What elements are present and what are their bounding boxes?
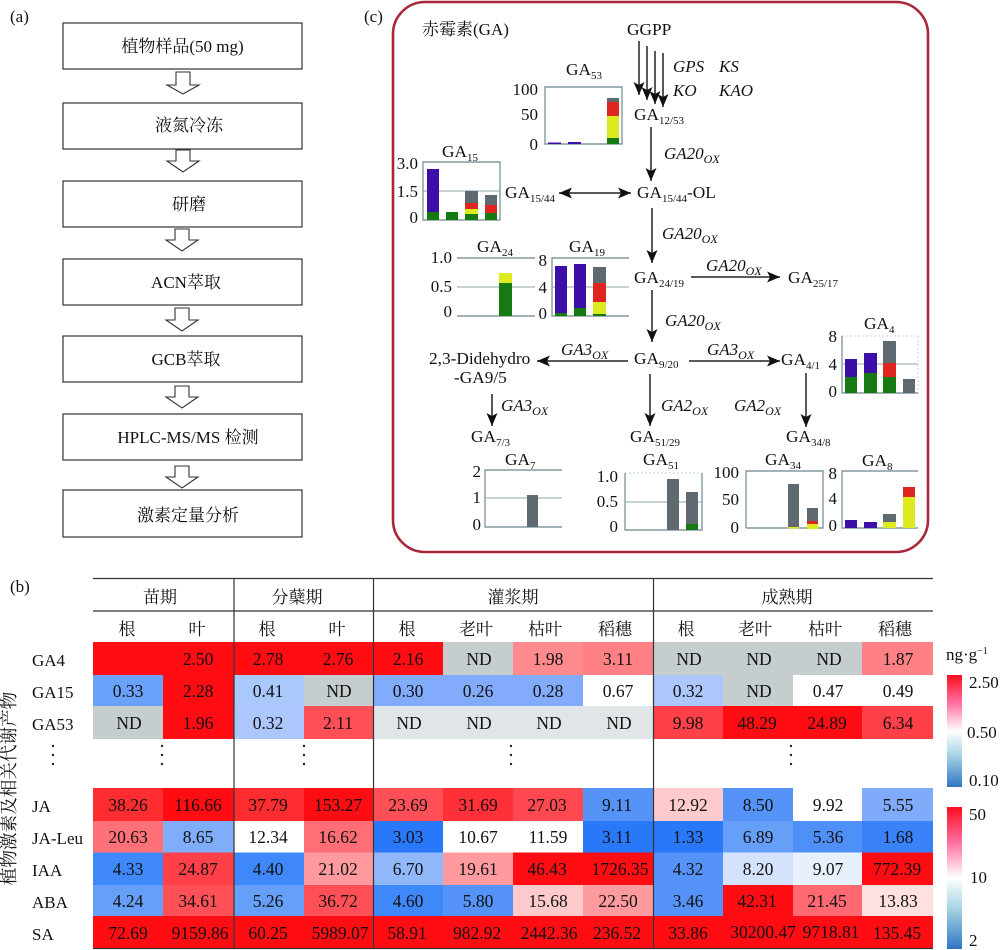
values: GA53: 9.98 <box>673 713 704 733</box>
legend: GA colour scale: 2.50 <box>969 673 999 692</box>
panel a label: (a) <box>10 7 29 26</box>
values: ABA: 36.72 <box>318 891 358 911</box>
panel border <box>393 2 928 552</box>
values: JA-Leu: 12.34 <box>248 827 288 847</box>
chart: GA4: 4 <box>828 355 838 374</box>
panel c label: (c) <box>364 7 383 26</box>
chart: GA19 <box>538 237 629 323</box>
row labels: JA <box>32 797 52 816</box>
step: grinding: 研磨 <box>172 195 206 214</box>
arrow: GA9/20 to GA51/29 <box>649 374 651 426</box>
step: hormone quantification <box>63 490 302 537</box>
values: GA53: 24.89 <box>807 713 847 733</box>
values: ABA: 5.26 <box>253 891 284 911</box>
enzyme: GA2ox right: OX <box>765 404 782 418</box>
node: GA4/1: GA <box>781 350 806 369</box>
values: SA: 5989.07 <box>312 923 369 943</box>
values: GA53: ND <box>116 713 142 733</box>
values: GA4: 2.78 <box>253 649 284 669</box>
node: GA12/53: 12/53 <box>659 115 685 127</box>
enzyme: GA3ox: GA3 <box>561 340 592 359</box>
values: JA-Leu: 3.11 <box>602 827 632 847</box>
arrow: GA9/20 to GA4/1 <box>689 360 780 362</box>
chart: GA7: 2 <box>472 462 481 481</box>
legend: other hormones colour scale: 50 <box>969 805 986 824</box>
chart: GA15: 15 <box>467 152 478 164</box>
values: GA4: ND <box>676 649 702 669</box>
arrow: step 3 to 4 <box>166 229 198 251</box>
values: SA: 135.45 <box>873 923 921 943</box>
enzyme: GA3ox: OX <box>738 348 755 362</box>
node: GA9/20: 9/20 <box>659 359 679 371</box>
table rules <box>93 578 933 949</box>
panel: hormone heatmap <box>0 578 999 950</box>
chart: GA7: 7 <box>530 460 536 472</box>
row cells: GA53 <box>93 706 933 739</box>
arrow: GA9/20 to didehydro <box>537 360 628 362</box>
chart: GA34: GA <box>765 450 790 469</box>
enzyme: GA20ox: OX <box>702 232 718 246</box>
row labels: GA53 <box>32 715 74 734</box>
chart: GA53: 0 <box>530 135 538 154</box>
cell values <box>108 649 921 943</box>
stage headers: 苗期 <box>143 588 177 607</box>
enzyme labels: GPS KS KO KAO: GPS <box>673 57 705 76</box>
values: GA15: 0.30 <box>393 681 424 701</box>
chart: GA24 <box>431 237 535 321</box>
chart: GA7: 0 <box>472 515 481 534</box>
values: JA: 9.92 <box>813 795 843 815</box>
tissue headers: 老叶 <box>738 620 772 639</box>
arrows: GGPP to GA12/53 <box>639 41 663 107</box>
step: hormone quantification: 激素定量分析 <box>137 506 239 525</box>
node: GA34/8: GA <box>786 427 811 446</box>
row cells: JA-Leu <box>93 821 933 853</box>
chart: GA51: 0.5 <box>597 492 618 511</box>
values: GA4: 1.98 <box>533 649 564 669</box>
node: GA34/8: 34/8 <box>811 437 831 449</box>
values: SA <box>108 922 921 943</box>
enzyme: GA2ox left: GA2 <box>661 396 692 415</box>
tissue headers: 根 <box>118 619 136 639</box>
row labels: IAA <box>32 861 63 880</box>
values: GA4: 1.87 <box>883 649 914 669</box>
values: SA: 982.92 <box>453 923 501 943</box>
values: JA-Leu: 20.63 <box>108 827 148 847</box>
values: JA: 23.69 <box>388 795 428 815</box>
enzyme: GA20ox: GA20 <box>706 256 746 275</box>
chart: GA53: GA <box>566 60 591 79</box>
enzyme: GA3ox: OX <box>592 348 609 362</box>
stage headers: 成熟期 <box>762 588 812 607</box>
values: JA-Leu: 1.33 <box>673 827 704 847</box>
values: ABA: 5.80 <box>463 891 494 911</box>
values: ABA: 4.60 <box>393 891 424 911</box>
node: GA7/3: 7/3 <box>496 437 511 449</box>
node: GGPP: GGPP <box>627 20 671 39</box>
values: ABA: 3.46 <box>673 891 704 911</box>
tissue headers: 枯叶 <box>808 620 842 639</box>
row cells: GA15 <box>93 675 793 706</box>
values: JA: 38.26 <box>108 795 148 815</box>
chart: GA24: 1.0 <box>431 248 452 267</box>
arrow: didehydro to GA7/3 <box>491 394 493 426</box>
stage headers <box>143 587 812 607</box>
chart: GA15: 0 <box>410 208 418 227</box>
values: GA4: 2.50 <box>183 649 214 669</box>
values: IAA: 24.87 <box>178 859 218 879</box>
enzyme labels: GPS KS KO KAO <box>672 57 753 100</box>
values: JA: 9.11 <box>602 795 632 815</box>
step: GCB extraction: GCB萃取 <box>152 349 220 369</box>
chart: GA24: 24 <box>502 247 513 259</box>
values: IAA: 4.40 <box>253 859 284 879</box>
chart: GA51: 51 <box>668 460 679 472</box>
values: JA: 116.66 <box>174 795 222 815</box>
values: IAA: 9.07 <box>813 859 844 879</box>
chart: GA24: GA <box>477 237 502 256</box>
chart: GA15: GA <box>442 142 467 161</box>
step: liquid nitrogen freezing <box>63 103 302 149</box>
chart: GA19: GA <box>569 237 594 256</box>
row labels: JA-Leu <box>32 829 83 848</box>
values: IAA: 19.61 <box>458 859 498 879</box>
values: JA-Leu: 6.89 <box>743 827 774 847</box>
values: JA-Leu: 10.67 <box>458 827 498 847</box>
enzyme: GA20ox: GA20 <box>662 224 702 243</box>
values: IAA: 772.39 <box>873 859 921 879</box>
legend unit: ng·g <box>946 645 977 664</box>
values: SA: 30200.47 <box>730 922 796 942</box>
chart: GA51: 1.0 <box>597 467 618 486</box>
node: GA12/53: GA <box>634 105 659 124</box>
chart: GA8: 4 <box>828 489 838 508</box>
values: GA15: 0.26 <box>463 681 494 701</box>
values: ABA <box>113 891 918 911</box>
step: plant sample <box>63 23 302 69</box>
values: ABA: 21.45 <box>807 891 847 911</box>
node: GA15/44-OL: -OL <box>687 183 716 202</box>
values: ABA: 13.83 <box>878 891 918 911</box>
enzyme: GA3ox: GA3 <box>707 340 738 359</box>
legend: other hormones colour scale: 10 <box>970 868 987 887</box>
values: GA15: 0.67 <box>603 681 634 701</box>
enzyme: GA20ox: OX <box>704 152 720 166</box>
step: ACN extraction <box>63 259 302 305</box>
chart: GA8 <box>828 451 918 535</box>
row cells: JA <box>93 788 933 821</box>
enzyme: GA3ox: GA3 <box>501 396 532 415</box>
values: SA: 60.25 <box>248 923 288 943</box>
values: GA15: 0.47 <box>813 681 844 701</box>
heatmap cells <box>93 642 933 949</box>
chart: GA51: 0 <box>610 517 618 536</box>
node: GA24/19: 24/19 <box>659 278 685 290</box>
arrow: GA4/1 to GA34/8 <box>805 373 807 427</box>
ellipsis dots <box>52 745 792 765</box>
values: IAA: 8.20 <box>743 859 774 879</box>
chart: GA4: GA <box>864 314 889 333</box>
stage headers: 分蘖期 <box>272 587 322 607</box>
values: GA4: 2.16 <box>393 649 424 669</box>
chart: GA34: 0 <box>730 518 739 537</box>
chart: GA51: GA <box>643 450 668 469</box>
step: GCB extraction <box>63 336 302 382</box>
chart: GA34: 50 <box>722 490 739 509</box>
chart: GA4: 0 <box>828 382 837 401</box>
chart: GA53: 100 <box>512 80 538 99</box>
arrow: step 5 to 6 <box>166 386 198 408</box>
values: ABA: 4.24 <box>113 891 144 911</box>
panel: extraction workflow <box>63 23 302 537</box>
node: GA24/19: GA <box>634 268 659 287</box>
node: 2,3-Didehydro-GA9/5 <box>429 349 530 387</box>
tissue headers: 叶 <box>328 620 346 639</box>
enzyme: GA20ox: GA20 <box>665 311 705 330</box>
values: JA: 5.55 <box>883 795 914 815</box>
chart: GA34: 34 <box>790 460 801 472</box>
enzyme: GA3ox: OX <box>532 404 549 418</box>
values: SA: 2442.36 <box>521 923 578 943</box>
values: GA53: ND <box>606 713 632 733</box>
values: SA: 72.69 <box>108 923 148 943</box>
legend: GA colour scale: 0.50 <box>967 723 997 742</box>
values: JA-Leu: 3.03 <box>393 827 424 847</box>
values: GA4: 2.76 <box>323 649 354 669</box>
values: GA4: 3.11 <box>603 649 633 669</box>
legend unit: −1 <box>977 646 988 657</box>
panel: gibberellin pathway <box>393 2 928 552</box>
node: GA4/1: 4/1 <box>806 360 820 372</box>
values: IAA: 6.70 <box>393 859 424 879</box>
tissue headers: 稻穗 <box>878 620 913 639</box>
values: JA: 37.79 <box>248 795 288 815</box>
values: GA4 <box>183 649 914 669</box>
step: HPLC-MS/MS detection <box>63 414 302 460</box>
values: GA15: ND <box>746 681 772 701</box>
step: grinding <box>63 181 302 227</box>
values: IAA: 46.43 <box>527 859 567 879</box>
node: 2,3-Didehydro-GA9/5: -GA9/5 <box>454 368 507 387</box>
values: IAA: 4.32 <box>673 859 703 879</box>
node: 2,3-Didehydro-GA9/5: 2,3-Didehydro <box>429 349 530 368</box>
step: liquid nitrogen freezing: 液氮冷冻 <box>155 116 224 135</box>
panel title: 赤霉素(GA) <box>422 20 509 39</box>
values: ABA: 42.31 <box>737 891 777 911</box>
values: JA-Leu: 8.65 <box>183 827 214 847</box>
legend: other hormones colour scale: 2 <box>969 931 978 950</box>
values: SA: 9159.86 <box>172 923 229 943</box>
chart: GA15 <box>397 142 500 227</box>
values: GA53: ND <box>396 713 422 733</box>
values: GA15: 0.32 <box>673 681 703 701</box>
values: JA-Leu: 5.36 <box>813 827 844 847</box>
values: IAA: 4.33 <box>113 859 144 879</box>
values: GA4: ND <box>746 649 772 669</box>
values: SA: 33.86 <box>668 923 708 943</box>
step: plant sample: 植物样品(50 mg) <box>121 37 244 56</box>
chart: GA4 <box>828 314 918 401</box>
step: ACN extraction: ACN萃取 <box>151 272 221 292</box>
node: GA25/17: GA <box>788 268 813 287</box>
values: GA4: ND <box>466 649 492 669</box>
tissue headers: 老叶 <box>459 620 493 639</box>
values: JA: 27.03 <box>527 795 567 815</box>
values: GA15: 0.49 <box>883 681 914 701</box>
chart: GA34 <box>714 450 823 537</box>
values: JA: 12.92 <box>668 795 708 815</box>
tissue headers: 枯叶 <box>528 620 562 639</box>
tissue headers: 稻穗 <box>598 620 633 639</box>
row labels: ABA <box>32 893 69 912</box>
chart: GA7 <box>472 450 562 534</box>
tissue headers: 叶 <box>188 620 206 639</box>
row labels: GA4 <box>32 651 66 670</box>
arrow: step 4 to 5 <box>166 308 198 331</box>
values: JA-Leu: 1.68 <box>883 827 914 847</box>
arrow: GA12/53 to GA15/44-OL <box>650 127 652 181</box>
values: JA-Leu <box>108 827 914 847</box>
chart: GA8: 8 <box>828 464 837 483</box>
values: GA15: ND <box>326 681 352 701</box>
values: GA53: ND <box>466 713 492 733</box>
node: GA25/17: 25/17 <box>813 278 839 290</box>
tissue headers: 根 <box>398 619 416 639</box>
values: JA-Leu: 16.62 <box>318 827 358 847</box>
node: GA15/44: 15/44 <box>530 193 556 205</box>
enzyme: GA20ox: GA20 <box>664 144 704 163</box>
node: GA51/29: GA <box>630 427 655 446</box>
arrow: step 1 to 2 <box>167 72 199 94</box>
panel b label: (b) <box>10 577 30 596</box>
row cells: ABA <box>93 885 933 916</box>
row labels <box>32 651 83 944</box>
legend: GA colour scale <box>947 673 999 790</box>
arrow: step 2 to 3 <box>167 150 199 172</box>
chart: GA4: 4 <box>889 324 895 336</box>
step: HPLC-MS/MS detection: HPLC-MS/MS 检测 <box>117 428 259 447</box>
values: IAA: 1726.35 <box>592 859 649 879</box>
node: GA9/20: GA <box>634 349 659 368</box>
arrow: GA15/44 reversible <box>559 192 631 194</box>
chart: GA53: 53 <box>591 70 602 82</box>
chart: GA19: 19 <box>594 247 605 259</box>
values: GA53: 0.32 <box>253 713 283 733</box>
chart: GA24: 0 <box>444 302 452 321</box>
arrow: GA24/19 to GA9/20 <box>651 290 653 342</box>
legend: other hormones colour scale <box>947 805 987 950</box>
tissue headers: 根 <box>258 619 276 639</box>
values: GA15: 0.41 <box>253 681 283 701</box>
chart: GA53 <box>512 60 622 154</box>
enzyme labels: GPS KS KO KAO: KS <box>718 57 739 76</box>
chart: GA53: 50 <box>521 105 538 124</box>
values: GA53: 2.11 <box>323 713 353 733</box>
chart: GA19: 4 <box>538 278 548 297</box>
chart: GA51 <box>597 450 702 536</box>
chart: GA8: GA <box>862 451 887 470</box>
values: IAA: 21.02 <box>318 859 358 879</box>
row cells: IAA <box>93 852 933 886</box>
node: GA15/44-OL: 15/44 <box>662 193 688 205</box>
values: GA4: ND <box>816 649 842 669</box>
values: JA: 31.69 <box>458 795 498 815</box>
node: GA51/29: 51/29 <box>655 437 681 449</box>
values: JA: 153.27 <box>314 795 362 815</box>
values: GA15: 0.28 <box>533 681 564 701</box>
values: GA53: ND <box>536 713 562 733</box>
stage headers: 灌浆期 <box>488 588 538 607</box>
row cells: SA <box>93 916 933 949</box>
node: GA15/44-OL: GA <box>637 183 662 202</box>
row cells: GA4 <box>93 642 933 675</box>
enzyme labels: GPS KS KO KAO: KAO <box>718 81 753 100</box>
enzyme: GA20ox: OX <box>705 319 721 333</box>
values: SA: 58.91 <box>387 923 427 943</box>
values: GA53: 48.29 <box>737 713 777 733</box>
values: GA53: 1.96 <box>183 713 214 733</box>
arrow: step 6 to 7 <box>166 466 198 488</box>
values: SA: 9718.81 <box>803 922 859 942</box>
chart: GA15: 1.5 <box>397 182 418 201</box>
row labels: GA15 <box>32 683 74 702</box>
chart: GA19: 0 <box>538 304 547 323</box>
chart: GA24: 0.5 <box>431 277 452 296</box>
values: ABA: 34.61 <box>178 891 218 911</box>
values: ABA: 22.50 <box>598 891 638 911</box>
enzyme: GA2ox right: GA2 <box>734 396 765 415</box>
enzyme: GA20ox: OX <box>746 264 762 278</box>
values: IAA <box>113 859 921 879</box>
arrow: GA15/44-OL to GA24/19 <box>651 208 653 263</box>
values: GA15: 0.33 <box>113 681 144 701</box>
values: GA15 <box>113 681 914 701</box>
legend: GA colour scale: 0.10 <box>969 771 999 790</box>
chart: GA4: 8 <box>828 327 837 346</box>
tissue headers <box>118 619 913 639</box>
chart: GA15: 3.0 <box>397 154 418 173</box>
chart: GA34: 100 <box>714 463 739 482</box>
values: SA: 236.52 <box>593 923 641 943</box>
values: ABA: 15.68 <box>528 891 568 911</box>
values: GA53 <box>116 713 914 733</box>
chart: GA7: GA <box>505 450 530 469</box>
values: GA53: 6.34 <box>883 713 914 733</box>
values: JA-Leu: 11.59 <box>529 827 568 847</box>
values: JA <box>108 795 914 815</box>
chart: GA8: 0 <box>828 516 837 535</box>
values: JA: 8.50 <box>743 795 774 815</box>
node: GA7/3: GA <box>471 427 496 446</box>
node: GA15/44: GA <box>505 183 530 202</box>
chart: GA8: 8 <box>887 461 893 473</box>
enzyme labels: GPS KS KO KAO: KO <box>672 81 697 100</box>
chart: GA7: 1 <box>472 488 481 507</box>
enzyme: GA2ox left: OX <box>692 404 709 418</box>
tissue headers: 根 <box>678 619 694 639</box>
chart: GA19: 8 <box>538 251 547 270</box>
arrow: GA24/19 to GA25/17 <box>691 276 780 278</box>
row labels: SA <box>32 925 54 944</box>
values: GA15: 2.28 <box>183 681 214 701</box>
